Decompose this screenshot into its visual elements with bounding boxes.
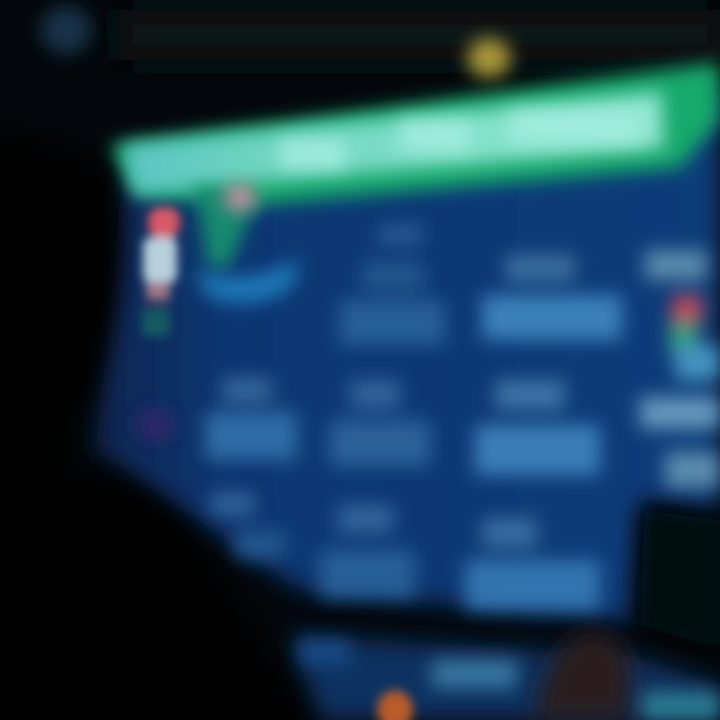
right status green bbox=[670, 322, 698, 356]
shoulders bbox=[0, 450, 315, 720]
top ambient area bbox=[120, 10, 720, 60]
right label middle bbox=[640, 397, 720, 429]
right status blue bbox=[675, 345, 720, 380]
pink header dot bbox=[224, 183, 256, 211]
tile: row 2 column 2 bbox=[330, 380, 430, 466]
bottom light chips bbox=[300, 640, 720, 720]
main screen panel bbox=[95, 90, 720, 622]
right label lower bbox=[665, 452, 720, 488]
tile: row 3 column 1 bbox=[210, 492, 285, 558]
green wedge under header bbox=[195, 185, 260, 268]
tile: row 2 column 3 bbox=[475, 380, 600, 475]
tile: row 3 column 2 bbox=[320, 505, 415, 598]
tile: row 3 column 3 bbox=[465, 518, 600, 610]
right label bbox=[645, 250, 707, 280]
tile: row 1 column 2 bbox=[340, 225, 445, 345]
tile: row 1 column 3 bbox=[482, 255, 622, 340]
blurred yellow lamp bbox=[467, 38, 511, 78]
left edge purple accent bbox=[137, 410, 173, 440]
blurred blue lamp bbox=[40, 6, 92, 54]
header text highlights bbox=[280, 112, 640, 168]
mint header bar bbox=[122, 92, 664, 195]
green header band bbox=[110, 62, 720, 205]
bottom screen strip bbox=[290, 635, 720, 720]
blue crescent chart bbox=[195, 258, 300, 304]
right side panel items bbox=[640, 250, 720, 488]
right status red bbox=[672, 296, 702, 320]
hand silhouette bbox=[535, 630, 632, 720]
person silhouette bbox=[0, 134, 315, 720]
red and white status icon bbox=[142, 207, 180, 336]
orange glow bottom bbox=[377, 690, 413, 720]
tile grid bbox=[205, 225, 622, 610]
lower dark console bbox=[640, 510, 720, 650]
tile: row 2 column 1 bbox=[205, 378, 297, 460]
head bbox=[0, 134, 118, 480]
